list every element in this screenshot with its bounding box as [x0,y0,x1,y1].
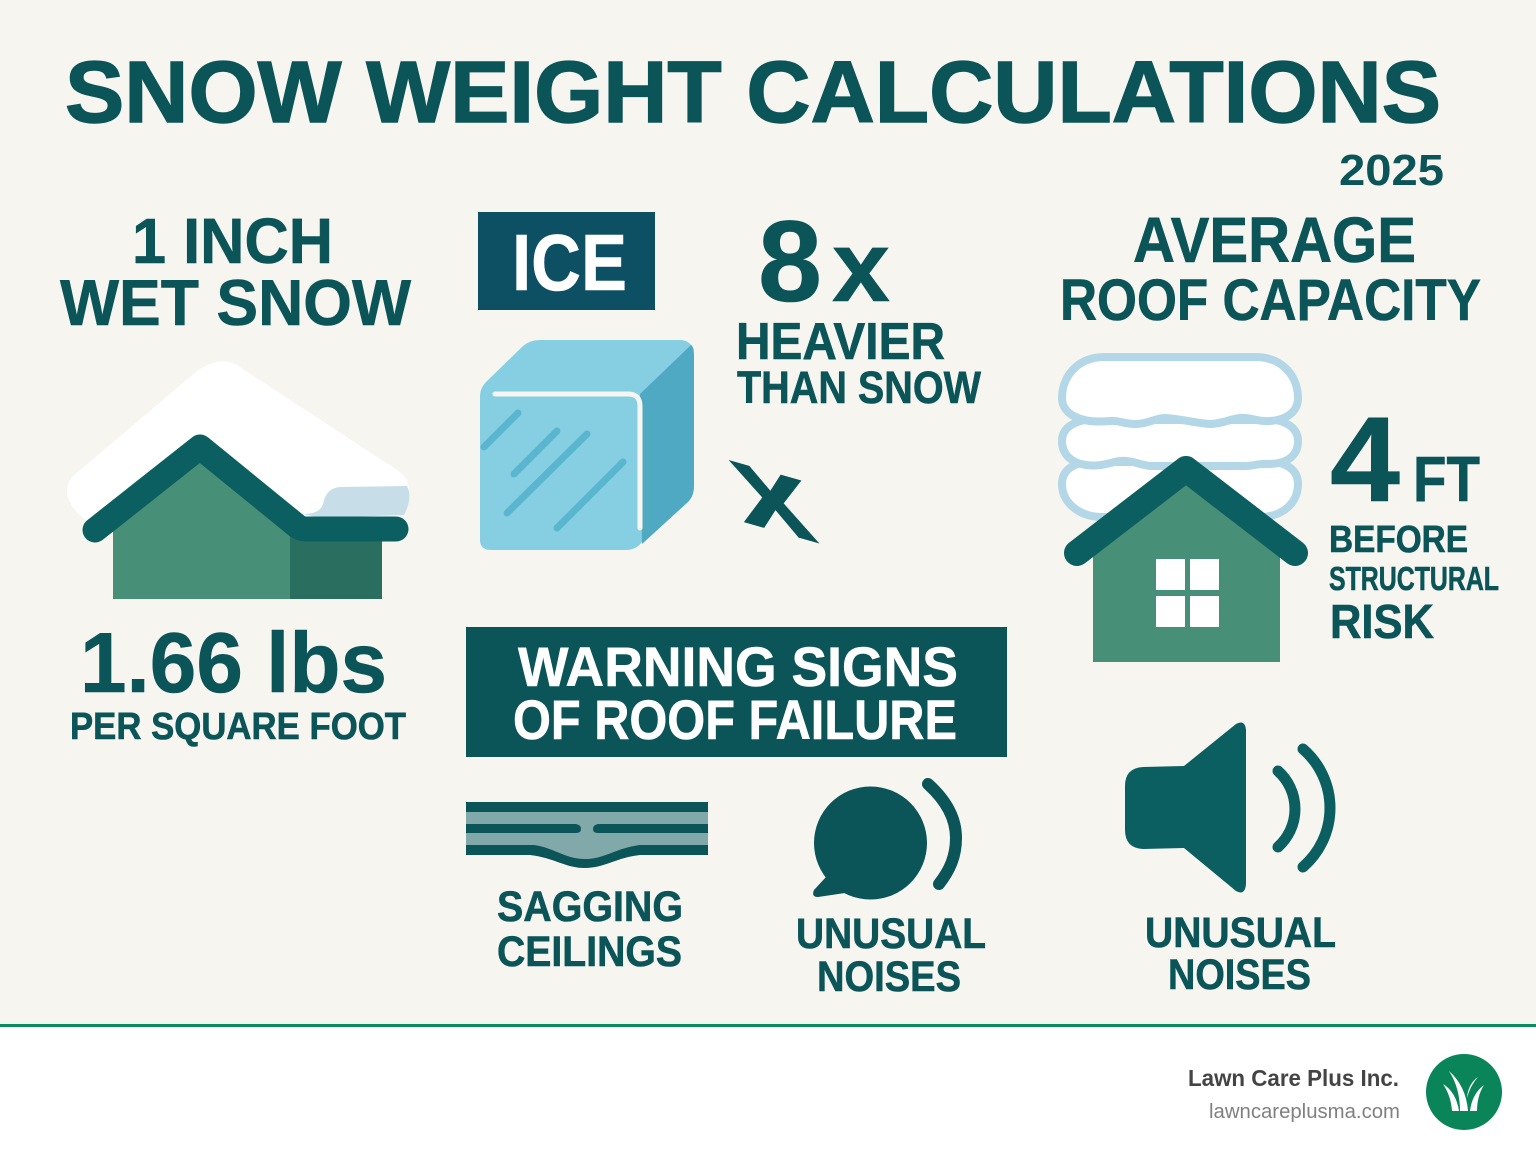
label: unusual noises: UNUSUAL [796,910,986,958]
stat: 8x heavier than snow: THAN SNOW [737,362,981,413]
icon: grass logo [1426,1054,1502,1130]
heading: 1 inch wet snow: WET SNOW [60,266,412,339]
heading: warning signs of roof failure: OF ROOF FAILURE [513,688,957,751]
label: sagging ceilings: SAGGING [497,883,683,931]
title: SNOW WEIGHT CALCULATIONS [65,44,1441,141]
label: sagging ceilings [497,883,683,976]
year: 2025 [1339,146,1444,195]
heading: average roof capacity: ROOF CAPACITY [1060,268,1481,333]
panel: warning signs [466,627,1336,1001]
icon: snow-covered house [67,361,409,599]
brand url: lawncareplusma.com [1209,1101,1400,1123]
icon: speaker with sound waves [1125,722,1330,892]
label: sagging ceilings: CEILINGS [497,928,682,976]
label: unusual noises: NOISES [817,953,961,1001]
label: unusual noises, second [1145,909,1336,999]
stat: 4 ft before structural risk: RISK [1330,596,1434,649]
stat: 4 ft before structural risk: FT [1413,443,1480,515]
label: ice badge: ICE [512,218,627,307]
heading: average roof capacity [1060,204,1481,333]
heading: warning signs of roof failure: WARNING SIGNS [518,635,958,698]
label: unusual noises, second: UNUSUAL [1145,909,1336,957]
panel: wet snow [60,205,412,748]
stat: 8x heavier than snow [736,198,981,413]
footer [0,1024,1536,1154]
brand name: Lawn Care Plus Inc. [1188,1065,1399,1091]
panel: ice [478,198,981,569]
icon: sagging ceiling [466,802,708,868]
icon: speech bubble with sound arc [813,784,956,900]
label: unusual noises [796,910,986,1001]
heading: warning signs of roof failure [466,627,1007,757]
heading: 1 inch wet snow: 1 INCH [132,205,333,277]
stat: 8x heavier than snow: 8 [758,198,822,326]
heading: 1 inch wet snow [60,205,412,339]
stat: 8x heavier than snow: HEAVIER [736,313,945,371]
stat: 4 ft before structural risk [1329,391,1499,649]
icon: ice cube [480,340,694,550]
panel: average roof capacity [1060,204,1499,662]
stat: 1.66 lbs: 1.66 lbs [80,616,387,711]
label: ice badge [478,212,655,310]
stat: 4 ft before structural risk: 4 [1330,391,1400,527]
icon: multiply sign: x [715,416,827,569]
heading: average roof capacity: AVERAGE [1133,204,1416,276]
stat: 8x heavier than snow: x [832,211,890,323]
caption: per square foot: PER SQUARE FOOT [70,706,406,748]
stat: 4 ft before structural risk: BEFORE [1329,519,1468,561]
icon: house under snow layers [1062,357,1298,662]
label: unusual noises, second: NOISES [1168,951,1311,999]
